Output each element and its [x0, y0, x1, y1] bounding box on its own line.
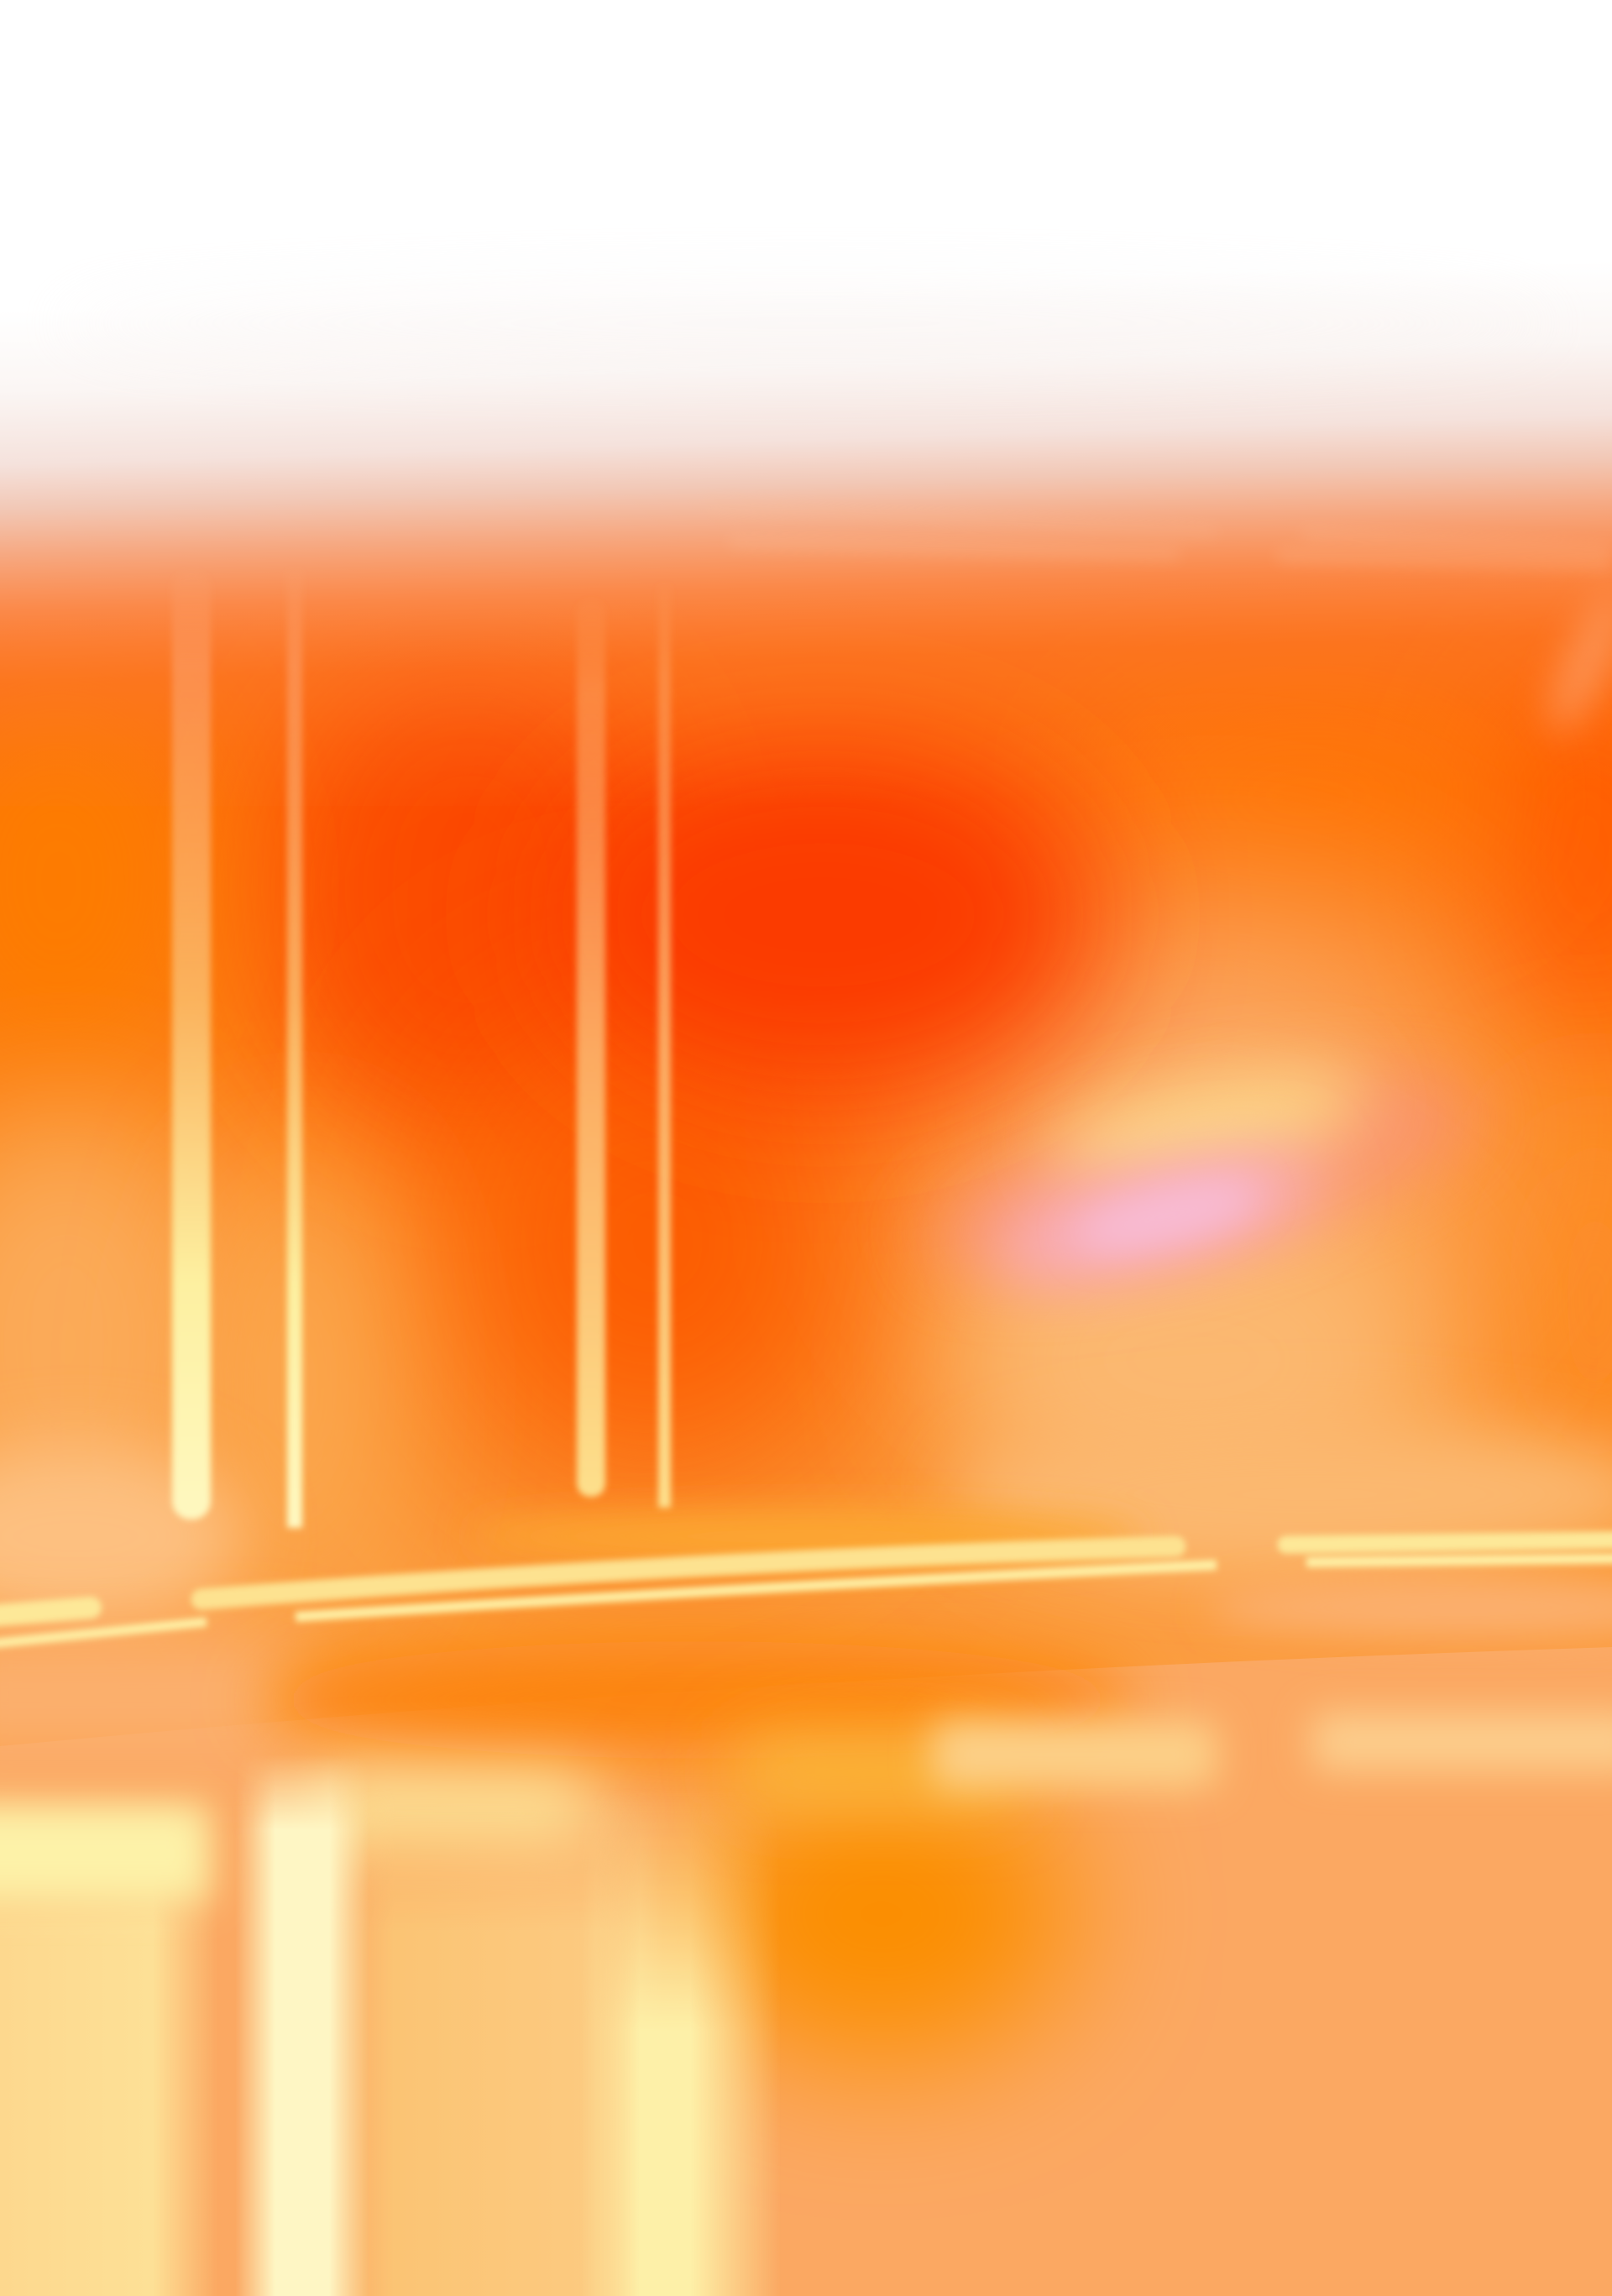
top white fade — [0, 0, 1612, 806]
vertical light tube 4 — [658, 586, 671, 1508]
glow above the horizontal tubes — [0, 1419, 1612, 1629]
peach glow behind the flare — [940, 898, 1486, 1545]
right edge glow — [1535, 585, 1612, 741]
lens flare — [907, 1037, 1494, 1314]
vertical light tube 1 — [172, 571, 211, 1519]
faint upper horizontal light streaks — [705, 505, 1612, 564]
central red glow — [546, 730, 1100, 1100]
warm colour patches — [0, 638, 1612, 1620]
vertical light tube 3 — [577, 600, 605, 1497]
vertical light tube 2 — [287, 571, 302, 1528]
floor reflections — [0, 1713, 1612, 2296]
floor band with darker orange — [0, 1578, 1612, 2296]
horizontal light tubes — [0, 1540, 1612, 1646]
